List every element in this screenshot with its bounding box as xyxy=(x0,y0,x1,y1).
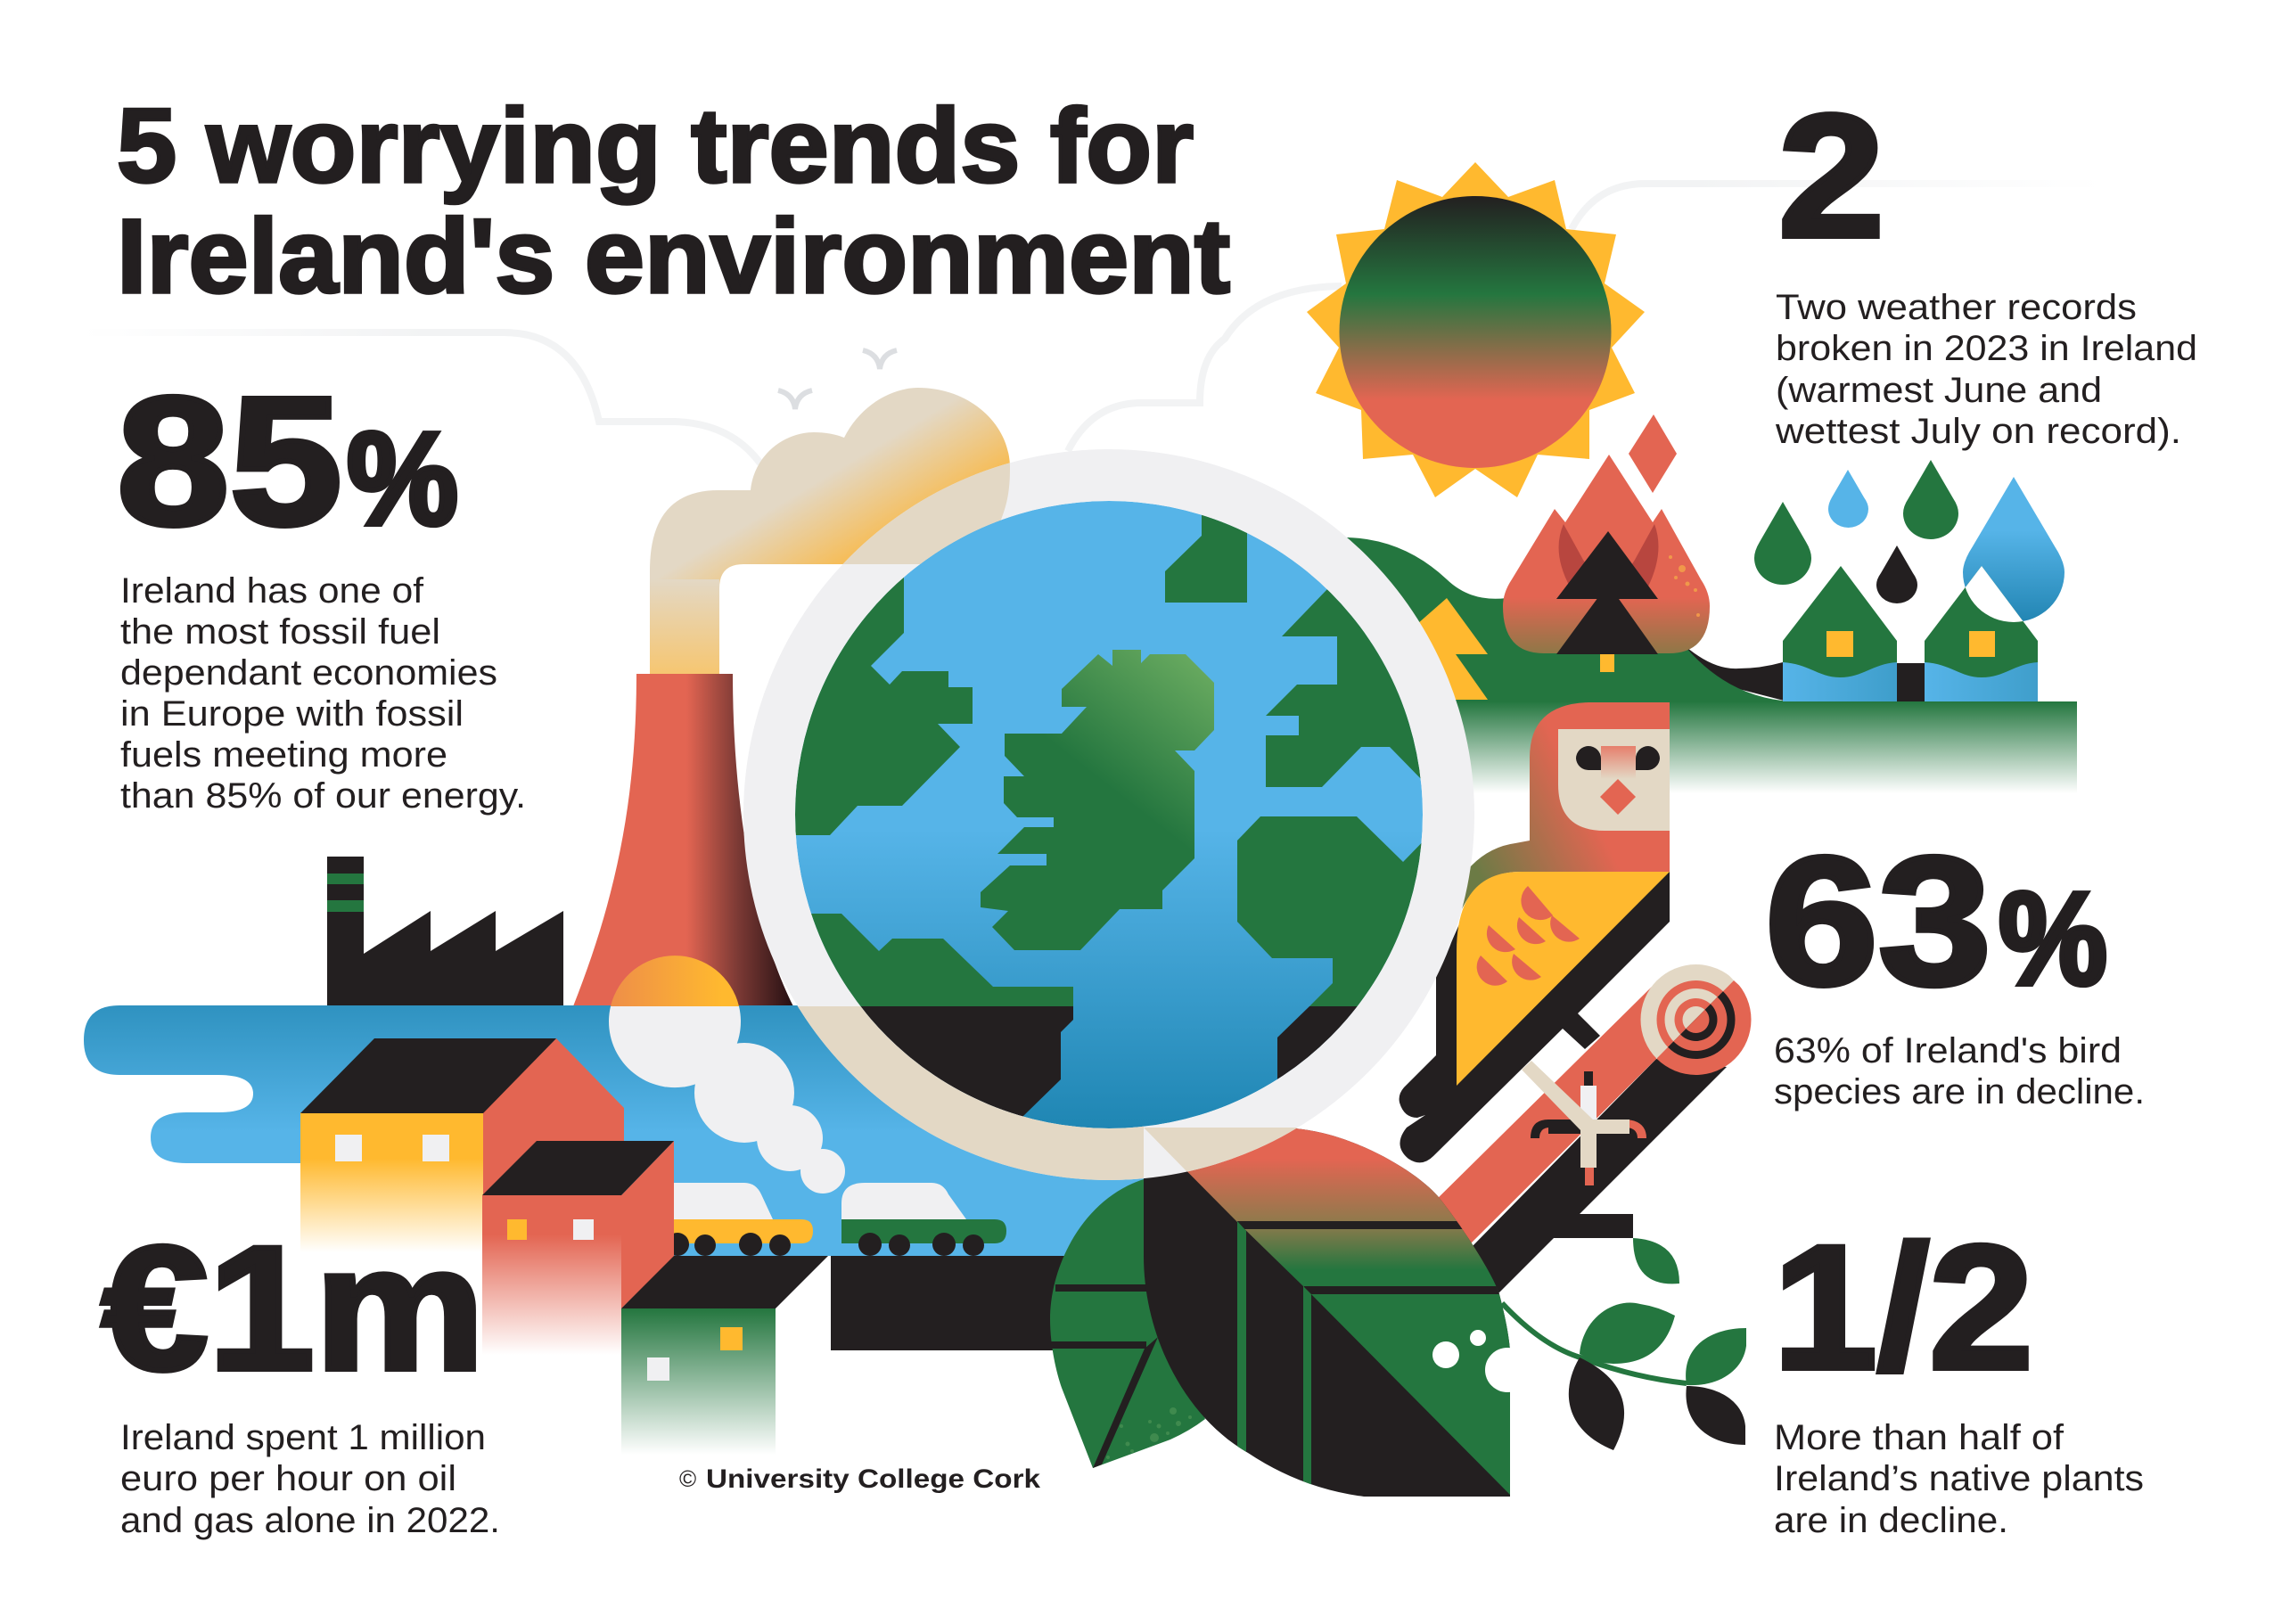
icon: yellow tree xyxy=(1417,598,1488,700)
text: 85% description xyxy=(120,571,526,816)
title: Ireland's environment xyxy=(117,198,1230,316)
stat: 85% xyxy=(117,359,526,816)
copyright: © xyxy=(679,1465,696,1492)
road block xyxy=(831,1256,1116,1350)
icon: rain drops xyxy=(1754,460,1958,603)
house: coral xyxy=(482,1141,674,1356)
land: right upper xyxy=(1266,589,1421,787)
sun xyxy=(1307,162,1645,497)
birds xyxy=(778,350,897,409)
text: 85% description: dependant economies xyxy=(120,653,497,693)
icon: burning tree xyxy=(1503,455,1710,672)
land: right lower dark xyxy=(1277,1006,1357,1079)
factory xyxy=(327,857,563,1005)
magnifying glass ring xyxy=(743,449,1474,1180)
house: green xyxy=(621,1256,828,1456)
land: lower left xyxy=(784,914,1073,1006)
smoke cloud xyxy=(650,388,1010,674)
stat: €1m xyxy=(102,1210,500,1540)
land: top right island xyxy=(1165,515,1247,603)
text: oil and gas spend: Ireland spent 1 million xyxy=(120,1418,486,1457)
small sun xyxy=(611,956,739,1006)
land: lower left dark xyxy=(861,1006,1073,1116)
text: 85% description: in Europe with fossil xyxy=(120,694,464,734)
stat: 1/2 xyxy=(1773,1209,2144,1540)
big leaf xyxy=(1144,1128,1530,1500)
left leaf xyxy=(1050,1179,1205,1468)
stat: 1/2: 1/2 xyxy=(1773,1209,2033,1406)
flooded houses xyxy=(1783,477,2064,701)
stat: 63%: % xyxy=(1999,865,2107,1013)
text: bird species xyxy=(1774,1031,2145,1111)
text: bird species: 63% of Ireland's bird xyxy=(1774,1031,2122,1070)
text: bird species: species are in decline. xyxy=(1774,1072,2145,1111)
title: 5 worrying trends for xyxy=(117,87,1194,205)
land: left xyxy=(795,578,973,835)
owl xyxy=(1400,702,1670,1162)
plant sprig xyxy=(1502,1238,1746,1450)
steam clouds xyxy=(609,1006,845,1193)
land: Ireland xyxy=(981,650,1214,950)
faint cloud outlines xyxy=(85,184,2101,463)
text: oil and gas spend xyxy=(120,1418,500,1540)
text: native plants xyxy=(1774,1418,2144,1540)
train: yellow xyxy=(666,1183,813,1256)
icon: chainsaw xyxy=(1522,1061,1646,1185)
text: native plants: More than half of xyxy=(1774,1418,2064,1457)
hills xyxy=(1337,537,2077,793)
stat: 2 xyxy=(1775,78,2197,451)
stat: 63%: 63 xyxy=(1765,819,1991,1023)
text: oil and gas spend: euro per hour on oil xyxy=(120,1459,456,1498)
title xyxy=(117,87,1230,316)
stat: 63% xyxy=(1765,819,2145,1111)
text: weather records: broken in 2023 in Ireland xyxy=(1776,329,2197,368)
text: 85% description: than 85% of our energy. xyxy=(120,776,526,816)
stat: 85%: % xyxy=(347,406,458,553)
globe xyxy=(784,499,1435,1159)
copyright: University College Cork xyxy=(706,1464,1040,1494)
text: weather records: wettest July on record). xyxy=(1775,412,2181,451)
text: 85% description: fuels meeting more xyxy=(120,735,447,775)
text: 85% description: the most fossil fuel xyxy=(120,612,440,652)
river / sky band xyxy=(84,1005,1159,1256)
text: weather records xyxy=(1775,288,2197,451)
text: weather records: Two weather records xyxy=(1776,288,2137,327)
cooling tower xyxy=(573,674,793,1006)
house: yellow xyxy=(300,1038,624,1257)
icon: flame diamond xyxy=(1629,414,1677,493)
log with chainsaw xyxy=(1426,964,1751,1294)
text: native plants: Ireland’s native plants xyxy=(1774,1459,2144,1498)
text: native plants: are in decline. xyxy=(1774,1501,2008,1540)
text: 85% description: Ireland has one of xyxy=(120,571,424,611)
stat: 85%: 85 xyxy=(117,359,342,563)
text: weather records: (warmest June and xyxy=(1776,371,2102,410)
text: oil and gas spend: and gas alone in 2022. xyxy=(120,1501,500,1540)
stat: €1m: €1m xyxy=(102,1210,485,1407)
train: green xyxy=(841,1183,1006,1256)
land: right lower xyxy=(1237,816,1435,1006)
stat: 2: 2 xyxy=(1778,78,1884,274)
